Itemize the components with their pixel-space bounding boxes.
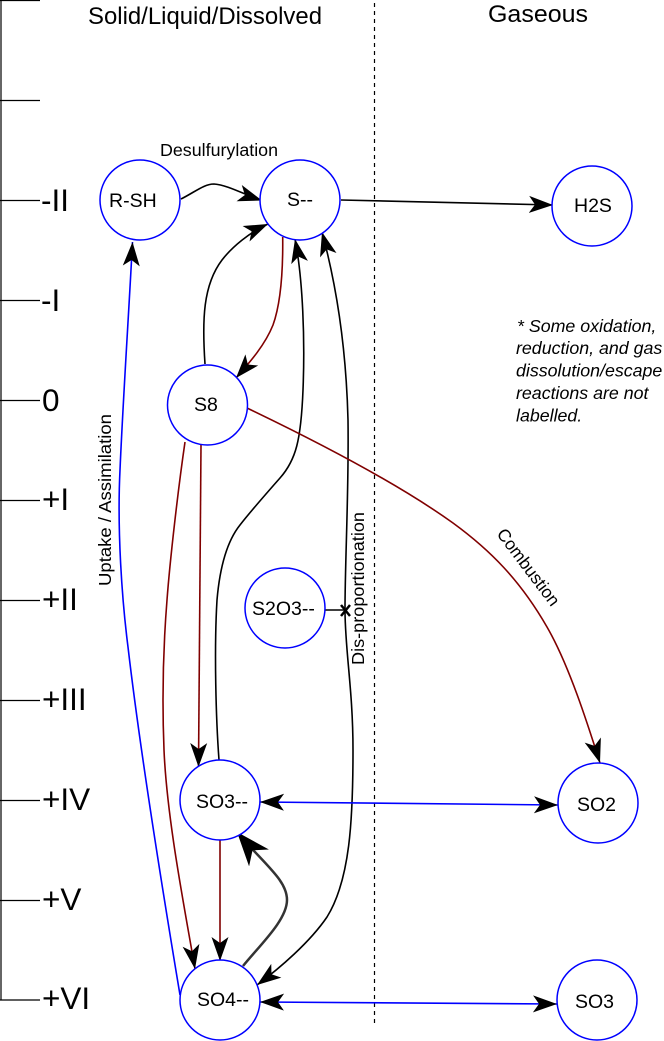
arrow: disproportionation S-- and SO4-- [257,232,353,985]
node: R-SH [100,160,180,240]
oxidation state axis: +I [42,481,69,517]
label: uptake and assimilation: Uptake / Assimilation [95,414,115,586]
arrow: S8 to SO4-- [163,442,195,969]
node: SO2: SO2 [577,794,616,816]
node: R-SH: R-SH [109,190,157,212]
node: H2S [552,166,632,246]
footnote: * Some oxidation, [517,316,656,336]
footnote: labelled. [516,406,582,426]
node: SO3--: SO3-- [196,791,248,813]
oxidation state axis: 0 [42,382,60,418]
node: S2O3-- [245,568,325,648]
arrow: S8 to SO3-- [198,445,201,767]
heading: solid liquid dissolved: Solid/Liquid/Dissolved [88,3,322,30]
arrow: S2O3-- crossed out link [325,605,350,616]
arrow: uptake and assimilation [119,242,180,995]
arrow: SO4-- to SO3-- [237,832,287,966]
oxidation state axis: +IV [42,781,90,817]
node: S2O3--: S2O3-- [252,598,315,620]
node: SO3: SO3 [575,991,614,1013]
node: SO2 [558,763,638,843]
node: S--: S-- [287,189,313,211]
label: disproportionation: Dis-proportionation [348,512,368,665]
node: S8 [168,365,248,445]
oxidation state axis: +II [42,581,78,617]
node: S8: S8 [194,394,218,416]
arrow: S8 to S-- [204,224,268,364]
arrow: combustion S8 to SO2 [247,408,600,763]
node: S-- [260,160,340,240]
label: combustion: Combustion [493,524,564,610]
oxidation state axis: +V [42,881,81,917]
oxidation state axis: +III [42,681,87,717]
heading: gaseous: Gaseous [488,1,588,28]
oxidation state axis: +VI [42,980,90,1016]
arrow: S-- to S8 [236,237,283,378]
oxidation state axis: -I [41,282,60,318]
oxidation state axis: -II [41,182,69,218]
footnote: dissolution/escape [516,360,662,380]
arrow: SO3-- to SO4-- [219,840,221,961]
node: SO4-- [180,960,260,1040]
arrow: SO4-- and SO3 exchange [260,1002,557,1004]
arrow: SO3-- and SO2 exchange [260,802,558,805]
node: SO4--: SO4-- [197,989,249,1011]
footnote: reduction, and gas [516,338,662,358]
node: SO3-- [180,760,260,840]
node: SO3 [557,960,637,1040]
label: desulfurylation: Desulfurylation [160,140,278,160]
oxidation state axis [0,0,90,1016]
arrow: desulfurylation R-SH to S-- [181,184,262,200]
footnote: reactions are not [516,383,650,403]
arrow: SO3-- to S-- [216,239,304,760]
arrow: S-- to H2S [341,200,553,205]
node: H2S: H2S [574,195,612,217]
